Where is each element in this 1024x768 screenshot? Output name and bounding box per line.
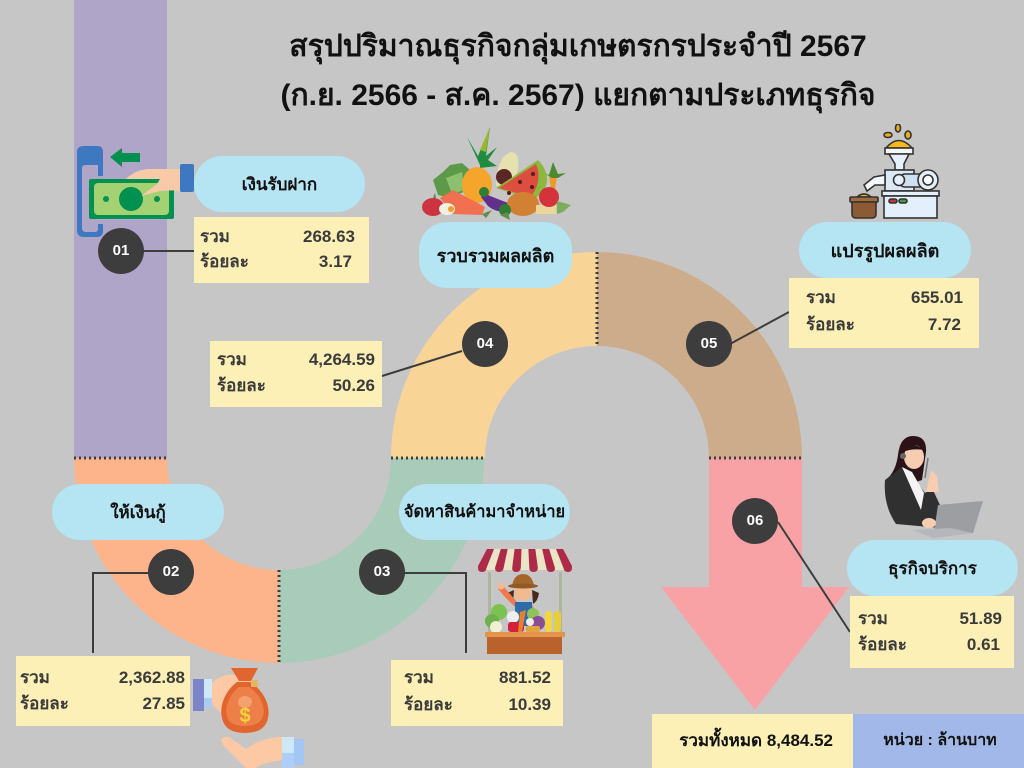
pill: services — [847, 540, 1018, 596]
data box: deposits: ร้อยละ — [200, 252, 249, 271]
data box: procurement: 881.52 — [499, 668, 551, 687]
data box: procurement: 10.39 — [508, 695, 551, 714]
total box — [652, 714, 853, 768]
icon: money bag exchange: $ — [239, 705, 251, 727]
data box: procurement: รวม — [404, 668, 434, 687]
data box: loans: 27.85 — [142, 694, 185, 713]
pill: collection: รวบรวมผลผลิต — [437, 246, 554, 266]
number badge 05 — [686, 321, 732, 367]
data box: processing — [789, 278, 979, 348]
data box: services: 0.61 — [967, 635, 1000, 654]
data box: processing: ร้อยละ — [806, 315, 855, 334]
number badge 04: 04 — [477, 335, 493, 352]
data box: deposits: รวม — [200, 227, 230, 246]
icon: market stall — [478, 549, 572, 654]
number badge 05: 05 — [701, 335, 717, 352]
ribbon: loans — [74, 458, 279, 663]
icon: food processing machine — [849, 124, 940, 219]
number badge 04 — [462, 321, 508, 367]
data box: processing: รวม — [806, 288, 836, 307]
pill: procurement — [399, 484, 570, 540]
number badge 01 — [98, 228, 144, 274]
title: (ก.ย. 2566 - ส.ค. 2567) แยกตามประเภทธุรกิจ — [280, 79, 876, 112]
data box: loans: 2,362.88 — [119, 668, 185, 687]
ribbon: processing — [597, 252, 802, 458]
number badge 01: 01 — [113, 242, 129, 259]
number badge 02: 02 — [163, 563, 179, 580]
number badge 03 — [359, 549, 405, 595]
ribbon: procurement — [279, 458, 484, 663]
pill: deposits — [194, 156, 365, 212]
ribbon: collection — [391, 252, 597, 458]
number badge 03: 03 — [374, 563, 390, 580]
data box: collection: 4,264.59 — [309, 350, 375, 369]
title: สรุปปริมาณธุรกิจกลุ่มเกษตรกรประจำปี 2567 — [289, 30, 867, 63]
data box: deposits — [194, 217, 369, 283]
data box: loans — [16, 656, 190, 726]
pill: collection — [419, 222, 572, 288]
data box: procurement: ร้อยละ — [404, 695, 453, 714]
icon: service agent — [884, 436, 983, 538]
pill: loans — [52, 484, 224, 540]
icon: fresh produce — [422, 127, 571, 220]
number badge 06: 06 — [747, 512, 763, 529]
total box: รวมทั้งหมด 8,484.52 — [679, 731, 833, 750]
icon: money bag exchange — [193, 668, 304, 768]
title — [280, 30, 876, 114]
data box: services — [850, 596, 1014, 668]
pill: services: ธุรกิจบริการ — [888, 558, 977, 578]
unit box: หน่วย : ล้านบาท — [883, 732, 997, 749]
pill: loans: ให้เงินกู้ — [110, 502, 166, 522]
unit box — [853, 714, 1024, 768]
ribbon arrow: services — [661, 458, 849, 710]
data box: collection: รวม — [217, 350, 247, 369]
data box: deposits: 268.63 — [303, 227, 355, 246]
data box: collection: ร้อยละ — [217, 376, 266, 395]
data box: collection: 50.26 — [332, 376, 375, 395]
data box: loans: ร้อยละ — [20, 694, 69, 713]
data box: services: ร้อยละ — [858, 635, 907, 654]
icon: cash deposit — [77, 146, 194, 237]
data box: services: 51.89 — [959, 609, 1002, 628]
pill: deposits: เงินรับฝาก — [242, 174, 317, 194]
data box: services: รวม — [858, 609, 888, 628]
data box: collection — [210, 341, 382, 407]
pill: processing: แปรรูปผลผลิต — [831, 240, 939, 260]
data box: processing: 655.01 — [911, 288, 963, 307]
data box: deposits: 3.17 — [319, 252, 352, 271]
data box: loans: รวม — [20, 668, 50, 687]
data box: procurement — [391, 660, 563, 726]
pill: procurement: จัดหาสินค้ามาจำหน่าย — [404, 503, 565, 521]
data box: processing: 7.72 — [928, 315, 961, 334]
ribbon: deposits — [74, 0, 167, 458]
connector lines — [93, 251, 850, 653]
number badge 02 — [148, 549, 194, 595]
number badge 06 — [732, 498, 778, 544]
pill: processing — [799, 222, 971, 278]
